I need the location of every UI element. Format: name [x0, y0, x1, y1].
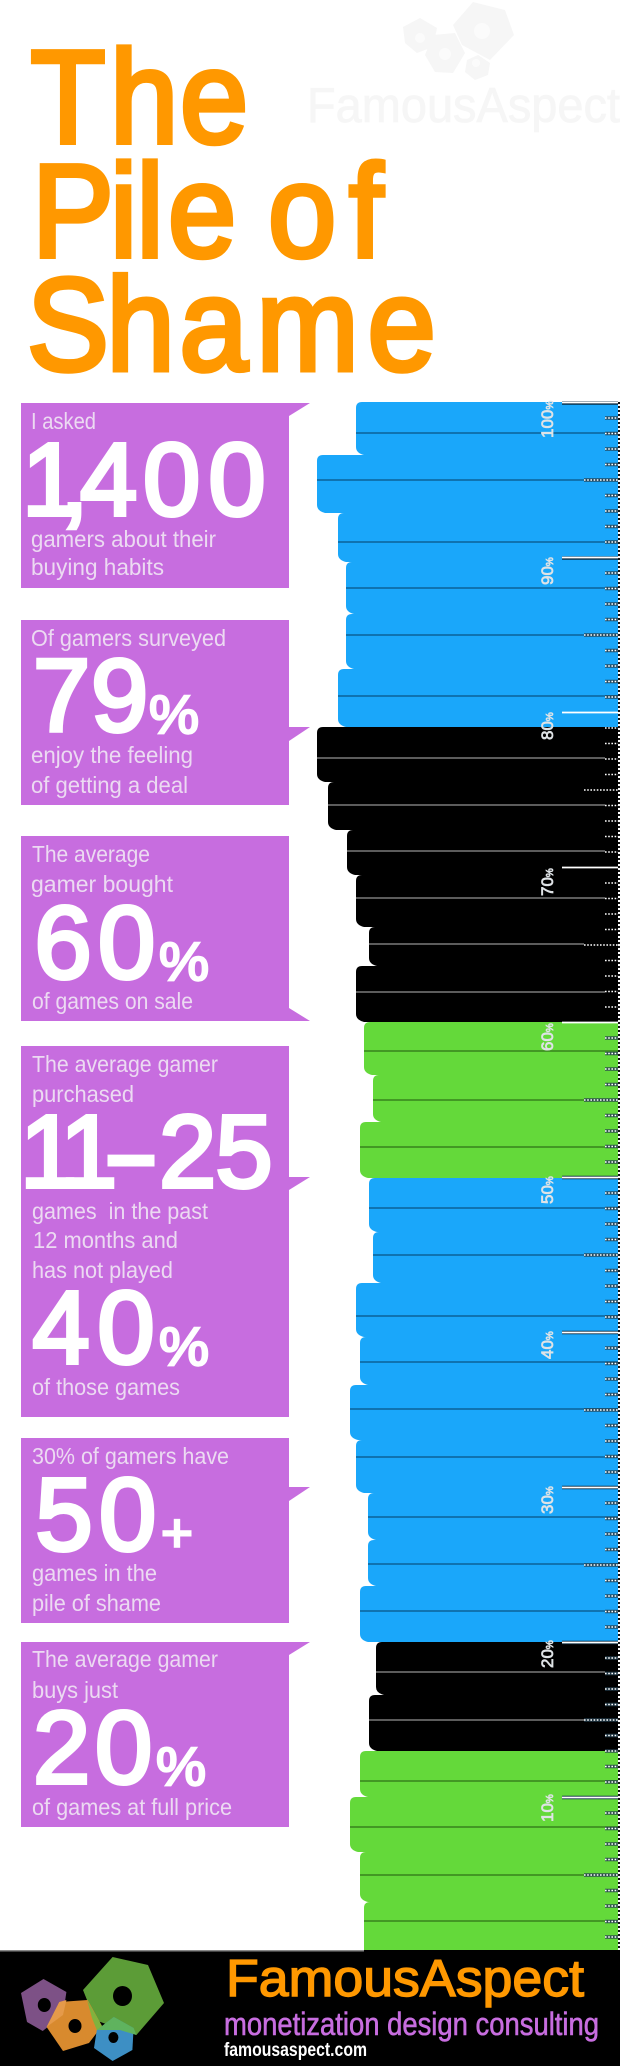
percentage ruler: labels: 80%: [538, 712, 557, 740]
stat: 60%: 60: [34, 885, 155, 1000]
stat: 40%: [32, 1270, 209, 1385]
percentage ruler: labels: 100%: [538, 401, 557, 438]
percentage ruler: labels: 70%: [538, 868, 557, 896]
title: [27, 24, 436, 399]
icon: FamousAspect hexagon logo: [21, 1957, 164, 2061]
percentage ruler: labels: 20%: [538, 1640, 557, 1668]
panel: 50+: games in the: [32, 1560, 157, 1586]
stat: 20%: 20: [33, 1690, 152, 1805]
panel: 79%: Of gamers surveyed: [31, 625, 226, 651]
stat: 1,400: 1,400: [22, 422, 266, 537]
panel: 1,400 gamers: gamers about their: [31, 526, 216, 552]
percentage ruler: labels: 90%: [538, 557, 557, 585]
panel: 1,400 gamers: buying habits: [31, 554, 164, 580]
title: The: [31, 24, 248, 171]
panel: 79%: enjoy the feeling: [31, 742, 193, 768]
panel: 11–25 games and 40%: The average gamer: [32, 1051, 218, 1077]
stat: 60%: %: [159, 932, 209, 992]
panel: 1,400 gamers: I asked: [31, 408, 96, 434]
panel: 11–25 games and 40%: 12 months and: [33, 1227, 178, 1253]
panel: 50+: 30% of gamers have: [32, 1443, 229, 1469]
stat: 40%: %: [159, 1317, 209, 1377]
panel: 60%: [21, 836, 310, 1021]
stat: 50+: +: [161, 1503, 193, 1563]
percentage ruler: labels: 40%: [538, 1331, 557, 1359]
percentage ruler: labels: 60%: [538, 1023, 557, 1051]
panel: 11–25 games and 40%: games in the past: [32, 1198, 209, 1224]
panel: 50+: [21, 1438, 310, 1623]
stat: 79%: 79: [33, 638, 148, 753]
percentage ruler: labels: [538, 401, 557, 1822]
panel: 50+: pile of shame: [32, 1590, 161, 1616]
stack section: green games, bottom: [350, 1751, 618, 1951]
stack section: black games, lower: [369, 1642, 618, 1751]
panel: 60%: of games on sale: [32, 988, 193, 1014]
panel: 79%: [21, 620, 310, 805]
title: Shame: [27, 252, 436, 399]
stat: 11–25: –: [111, 1115, 152, 1195]
stack section: green games, middle: [360, 1022, 618, 1178]
stat: 79%: %: [149, 685, 199, 745]
footer band: [0, 1950, 620, 2066]
percentage ruler: labels: 30%: [538, 1486, 557, 1514]
panel: 11–25 games and 40%: purchased: [32, 1081, 134, 1107]
stat: 11–25: 11: [20, 1094, 117, 1209]
pile of games: game stack: [317, 402, 618, 1951]
stack section: blue games, lower: [350, 1178, 618, 1642]
panel: 11–25 games and 40%: of those games: [32, 1374, 180, 1400]
panel: 79%: of getting a deal: [31, 772, 188, 798]
footer url: famousaspect.com: [224, 2040, 367, 2061]
panel: 60%: The average: [32, 841, 150, 867]
stat: 20%: %: [156, 1737, 206, 1797]
stack section: black games, upper: [317, 727, 618, 1022]
stat: 11–25: 25: [159, 1094, 273, 1209]
stat: 60%: [34, 885, 209, 1000]
percentage ruler: labels: 10%: [538, 1794, 557, 1822]
title: Pile of: [32, 138, 384, 285]
panel: 1,400 gamers: [21, 403, 310, 588]
panel: 11–25 games and 40%: has not played: [32, 1257, 173, 1283]
stack section: blue games, top: [317, 402, 618, 727]
footer brand name: FamousAspect: [226, 1950, 585, 2008]
panel: 20%: [21, 1642, 310, 1827]
watermark: FamousAspect logo: [403, 2, 514, 80]
panel: 20%: buys just: [32, 1677, 119, 1703]
panel: 11–25 games and 40%: [20, 1046, 310, 1417]
stat: 20%: [33, 1690, 206, 1805]
panel: 60%: gamer bought: [31, 871, 174, 897]
stat: 40%: 40: [32, 1270, 155, 1385]
stat: 79%: [33, 638, 199, 753]
percentage ruler: labels: 50%: [538, 1176, 557, 1204]
percentage ruler: ticks: [562, 402, 619, 1951]
panel: 20%: The average gamer: [32, 1646, 218, 1672]
stat: 50+: 50: [35, 1457, 156, 1572]
panel: 20%: of games at full price: [32, 1794, 232, 1820]
